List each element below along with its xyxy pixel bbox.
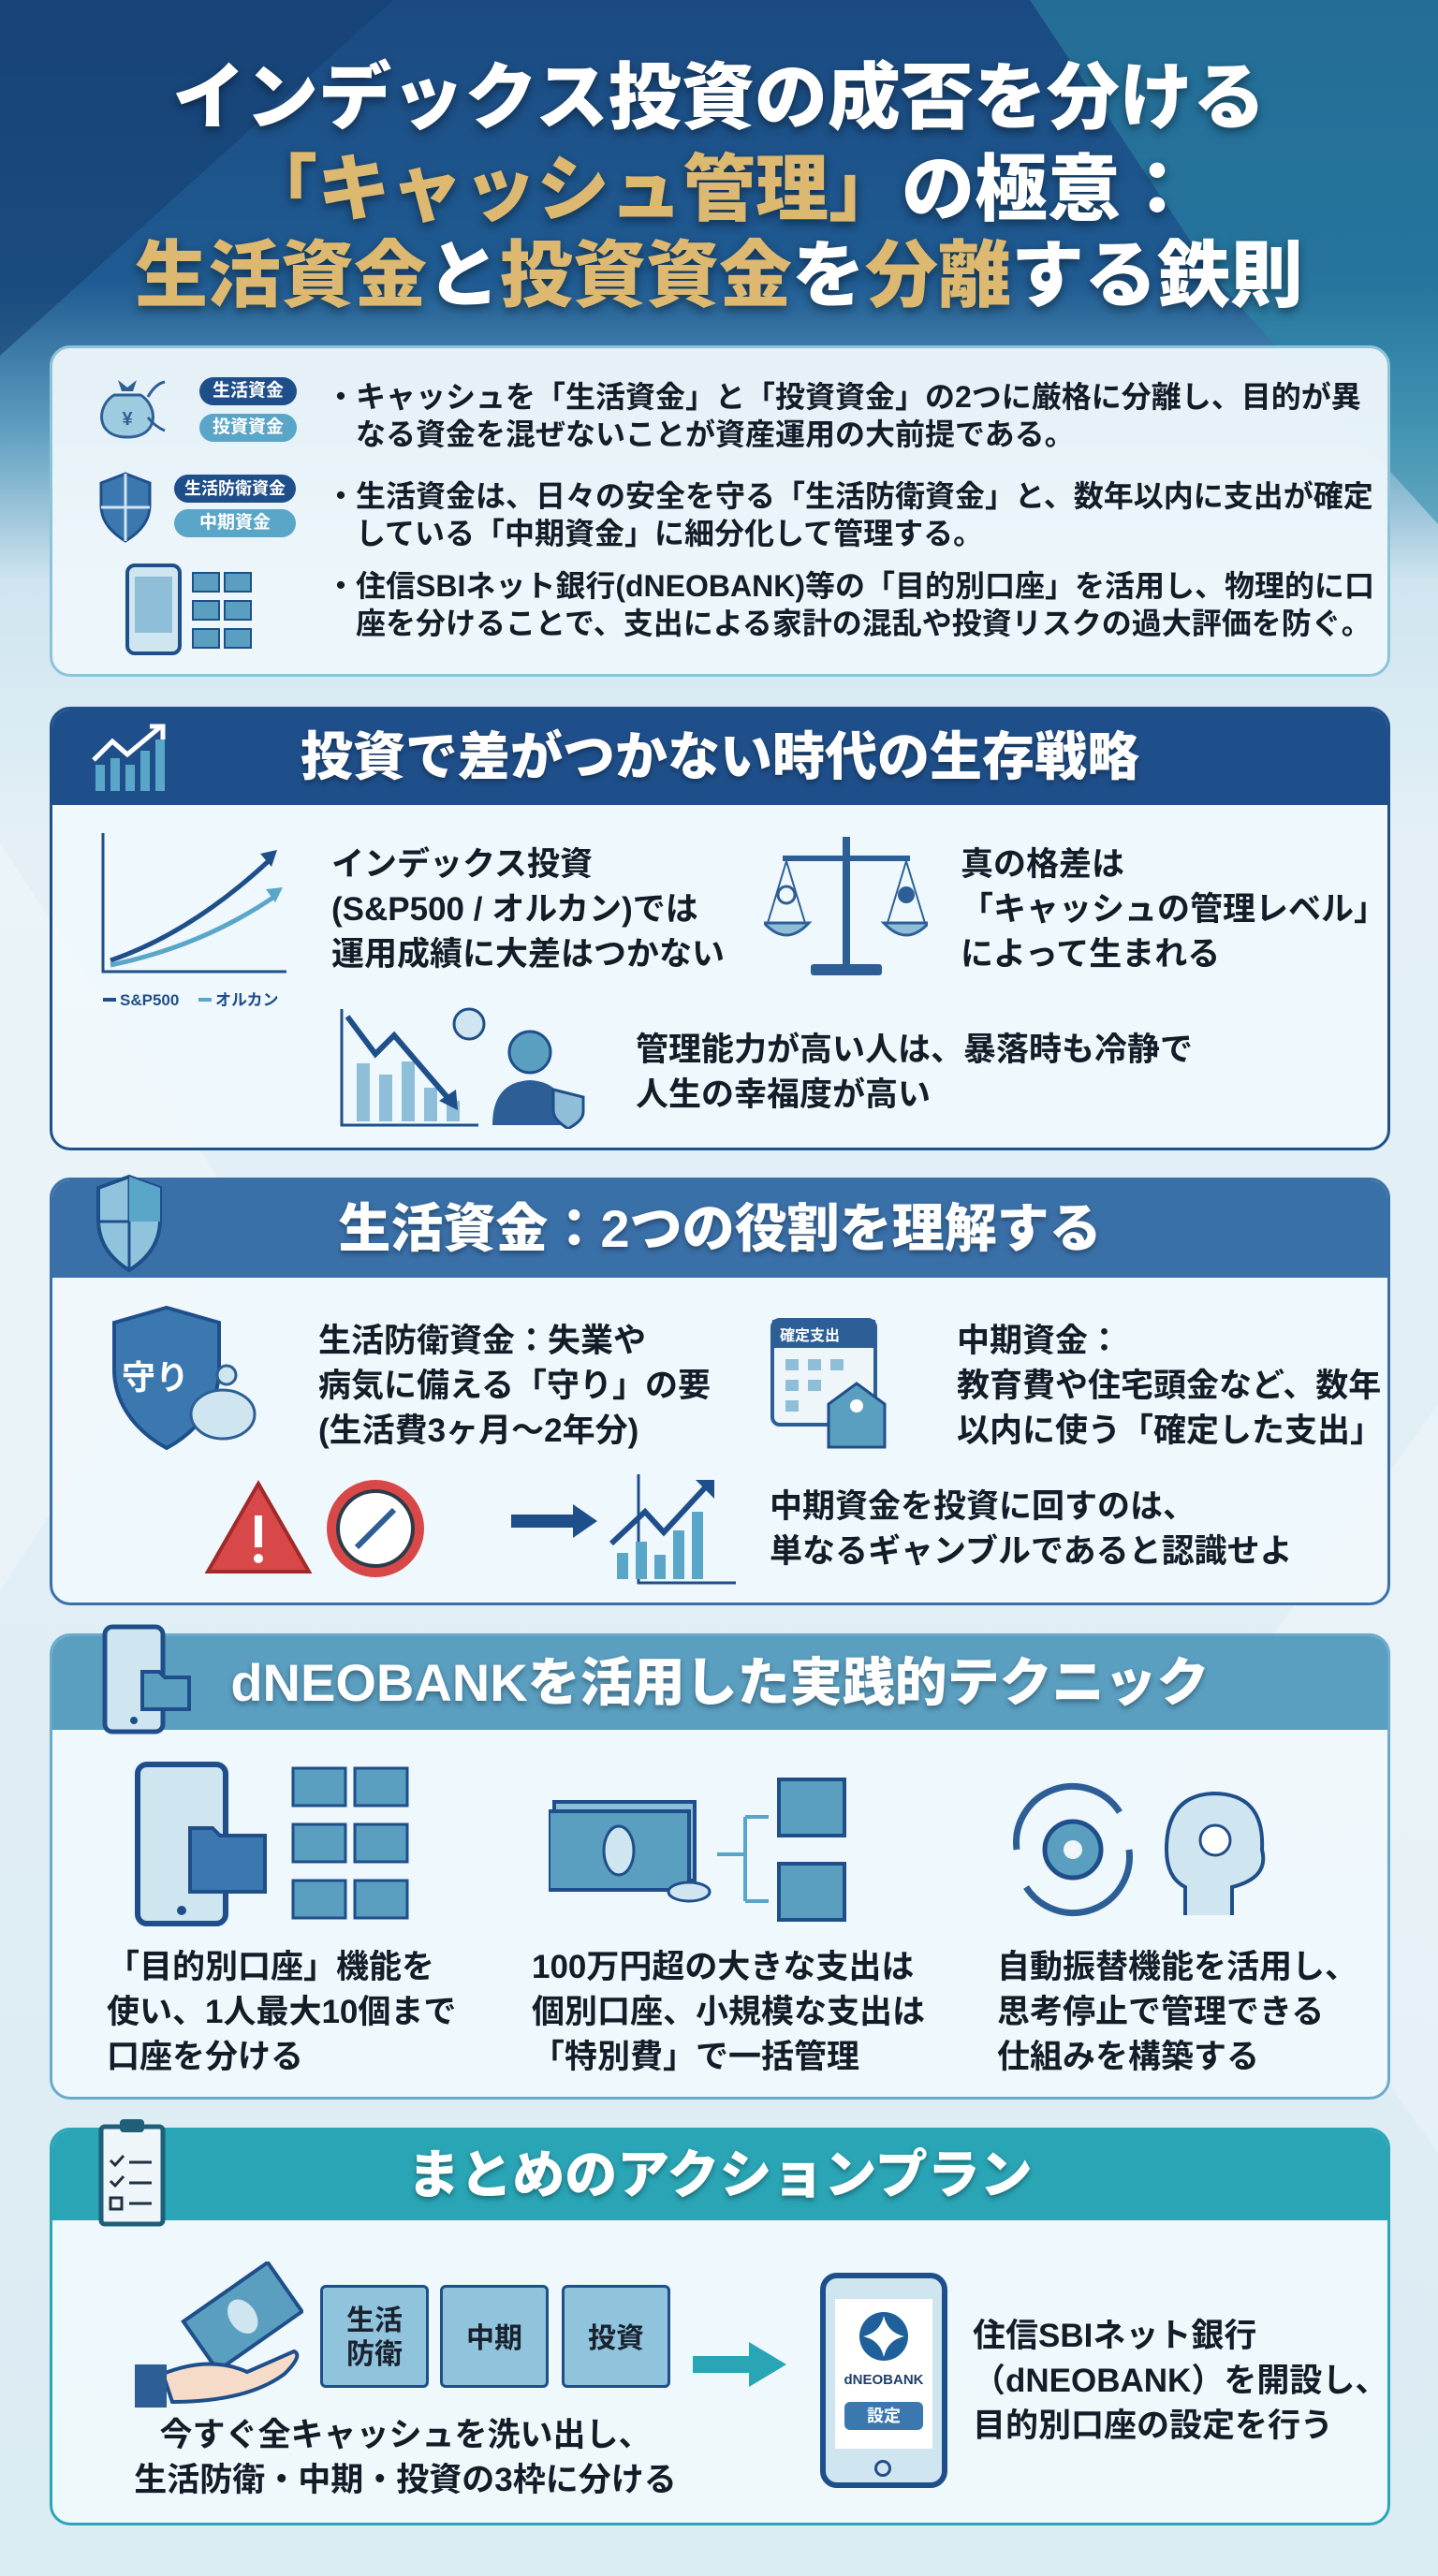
bullet 2: している「中期資金」に細分化して管理する。 <box>356 517 983 550</box>
panel: survival strategy <box>50 707 1390 1150</box>
text: open account: 目的別口座の設定を行う <box>973 2408 1333 2444</box>
col3 text: 自動振替機能を活用し、 <box>997 1949 1357 1985</box>
col2 text <box>532 1949 925 2075</box>
folders: 生活防衛 / 中期 / 投資: 生活 <box>346 2305 403 2336</box>
panel: summary <box>50 345 1390 677</box>
text: index investing: インデックス投資 <box>331 846 593 883</box>
pill: 中期資金 <box>174 509 296 537</box>
col1 text <box>107 1949 456 2075</box>
bullet 3: 座を分けることで、支出による家計の混乱や投資リスクの過大評価を防ぐ。 <box>356 607 1372 640</box>
col3 text <box>997 1949 1357 2075</box>
heading <box>52 1636 1387 1730</box>
title: 生活資金と投資資金を分離する鉄則 <box>135 234 1303 316</box>
text: calm in crash: 管理能力が高い人は、暴落時も冷静で <box>636 1032 1193 1068</box>
col3 text: 仕組みを構築する <box>997 2039 1259 2075</box>
bullet 3: ・住信SBIネット銀行(dNEOBANK)等の「目的別口座」を活用し、物理的に口 <box>326 569 1374 603</box>
icon: hand with money <box>135 2261 303 2408</box>
title <box>134 56 1304 316</box>
heading <box>52 1180 1387 1278</box>
icon: scale <box>764 837 928 975</box>
col2 icon: money split to folders <box>549 1778 846 1922</box>
icon: money bag with arrows <box>100 380 165 438</box>
icon: shield <box>99 472 152 543</box>
icon: dNEOBANK phone: dNEOBANK <box>844 2372 923 2388</box>
arrow <box>693 2342 786 2387</box>
text: index investing: (S&P500 / オルカン)では <box>331 891 698 928</box>
pill: 投資資金 <box>199 414 297 442</box>
bullet 2 <box>326 479 1373 550</box>
col1 icon: phone with folders <box>135 1762 408 1926</box>
col3 text: 思考停止で管理できる <box>997 1994 1324 2030</box>
icon: shield header <box>96 1174 162 1273</box>
bullet 3 <box>326 569 1374 640</box>
text: open account: （dNEOBANK）を開設し、 <box>973 2363 1387 2399</box>
heading: 生活資金：2つの役割を理解する <box>338 1199 1102 1258</box>
panel: two roles <box>50 1178 1390 1605</box>
col2 text: 個別口座、小規模な支出は <box>532 1994 925 2030</box>
heading: 投資で差がつかない時代の生存戦略 <box>301 727 1139 786</box>
col2 text: 100万円超の大きな支出は <box>532 1949 914 1985</box>
text: gamble warning: 中期資金を投資に回すのは、 <box>770 1488 1196 1525</box>
text: index investing <box>331 846 725 973</box>
icon: dNEOBANK phone <box>820 2273 947 2488</box>
bullet 1 <box>326 380 1361 451</box>
col2 text: 「特別費」で一括管理 <box>532 2039 859 2075</box>
icon: dNEOBANK phone: 設定 <box>867 2407 901 2425</box>
text: calm in crash: 人生の幸福度が高い <box>636 1076 931 1113</box>
text: defense fund: 生活防衛資金：失業や <box>318 1323 646 1359</box>
col1 text: 使い、1人最大10個まで <box>107 1994 456 2030</box>
heading <box>52 710 1387 805</box>
col1 text: 「目的別口座」機能を <box>107 1949 434 1985</box>
panel: action plan <box>50 2128 1390 2525</box>
icon: clipboard <box>99 2119 165 2226</box>
text: mid-term fund: 中期資金： <box>957 1323 1121 1359</box>
title: 「キャッシュ管理」の極意： <box>244 148 1194 230</box>
heading: まとめのアクションプラン <box>407 2145 1033 2204</box>
text: gamble warning <box>770 1488 1293 1570</box>
pill: 生活防衛資金: 生活防衛資金 <box>184 479 286 498</box>
icon: calendar and school: 確定支出 <box>780 1328 840 1344</box>
icon: shield 守り with piggy bank: 守り <box>122 1358 189 1397</box>
chart: S&P500 vs オルカン: オルカン <box>215 991 279 1009</box>
icon: growth chart <box>92 724 165 791</box>
text: gamble warning: 単なるギャンブルであると認識せよ <box>770 1533 1293 1570</box>
title: インデックス投資の成否を分ける <box>172 56 1266 139</box>
text: real gap: 真の格差は <box>961 846 1124 883</box>
pill: 生活資金 <box>199 377 297 405</box>
bullet 2: ・生活資金は、日々の安全を守る「生活防衛資金」と、数年以内に支出が確定 <box>326 479 1373 513</box>
folders: 生活防衛 / 中期 / 投資: 防衛 <box>346 2339 403 2370</box>
heading <box>52 2130 1387 2220</box>
text: real gap: によって生まれる <box>961 936 1220 973</box>
heading: dNEOBANKを活用した実践的テクニック <box>230 1653 1210 1712</box>
icon: shield 守り with piggy bank <box>112 1305 257 1451</box>
icon: money bag with arrows: ¥ <box>122 409 133 430</box>
icon: phone header <box>103 1625 191 1734</box>
text: real gap: 「キャッシュの管理レベル」 <box>961 891 1387 928</box>
text: defense fund: (生活費3ヶ月〜2年分) <box>318 1412 638 1449</box>
icon: warning, chip, arrow, chart <box>204 1474 736 1584</box>
folders: 生活防衛 / 中期 / 投資: 投資 <box>588 2323 644 2354</box>
text: index investing: 運用成績に大差はつかない <box>331 936 725 973</box>
text: defense fund: 病気に備える「守り」の要 <box>318 1368 711 1404</box>
text: mid-term fund: 教育費や住宅頭金など、数年 <box>957 1368 1381 1404</box>
text: defense fund <box>318 1323 711 1449</box>
chart: S&P500 vs オルカン: S&P500 <box>120 991 179 1009</box>
text: calm in crash <box>636 1032 1193 1113</box>
icon: calendar and school <box>770 1318 886 1449</box>
text: open account: 住信SBIネット銀行 <box>973 2318 1256 2354</box>
text: real gap <box>961 846 1387 973</box>
folders: 生活防衛 / 中期 / 投資 <box>320 2285 670 2388</box>
bullet 1: ・キャッシュを「生活資金」と「投資資金」の2つに厳格に分離し、目的が異 <box>326 380 1361 414</box>
pill: 中期資金: 中期資金 <box>199 513 271 533</box>
col1 text: 口座を分ける <box>107 2039 303 2075</box>
bullet 1: なる資金を混ぜないことが資産運用の大前提である。 <box>356 417 1075 451</box>
text: mid-term fund <box>957 1323 1383 1449</box>
text: open account <box>973 2318 1387 2444</box>
icon: crash chart and calm person <box>341 1007 584 1129</box>
pill: 投資資金: 投資資金 <box>213 417 284 437</box>
text: list cash <box>134 2417 677 2498</box>
chart: S&P500 vs オルカン <box>101 833 286 1009</box>
text: mid-term fund: 以内に使う「確定した支出」 <box>957 1412 1383 1449</box>
folders: 生活防衛 / 中期 / 投資: 中期 <box>466 2323 522 2354</box>
pill: 生活資金: 生活資金 <box>213 381 284 401</box>
pill: 生活防衛資金 <box>174 475 296 503</box>
icon: phone and folders <box>125 564 252 655</box>
col3 icon: gear cycle and head <box>1013 1782 1266 1917</box>
panel: dNEOBANK techniques <box>50 1633 1390 2100</box>
text: list cash: 今すぐ全キャッシュを洗い出し、 <box>159 2417 652 2453</box>
text: list cash: 生活防衛・中期・投資の3枠に分ける <box>134 2462 677 2498</box>
icon: rising chart <box>609 1480 714 1579</box>
